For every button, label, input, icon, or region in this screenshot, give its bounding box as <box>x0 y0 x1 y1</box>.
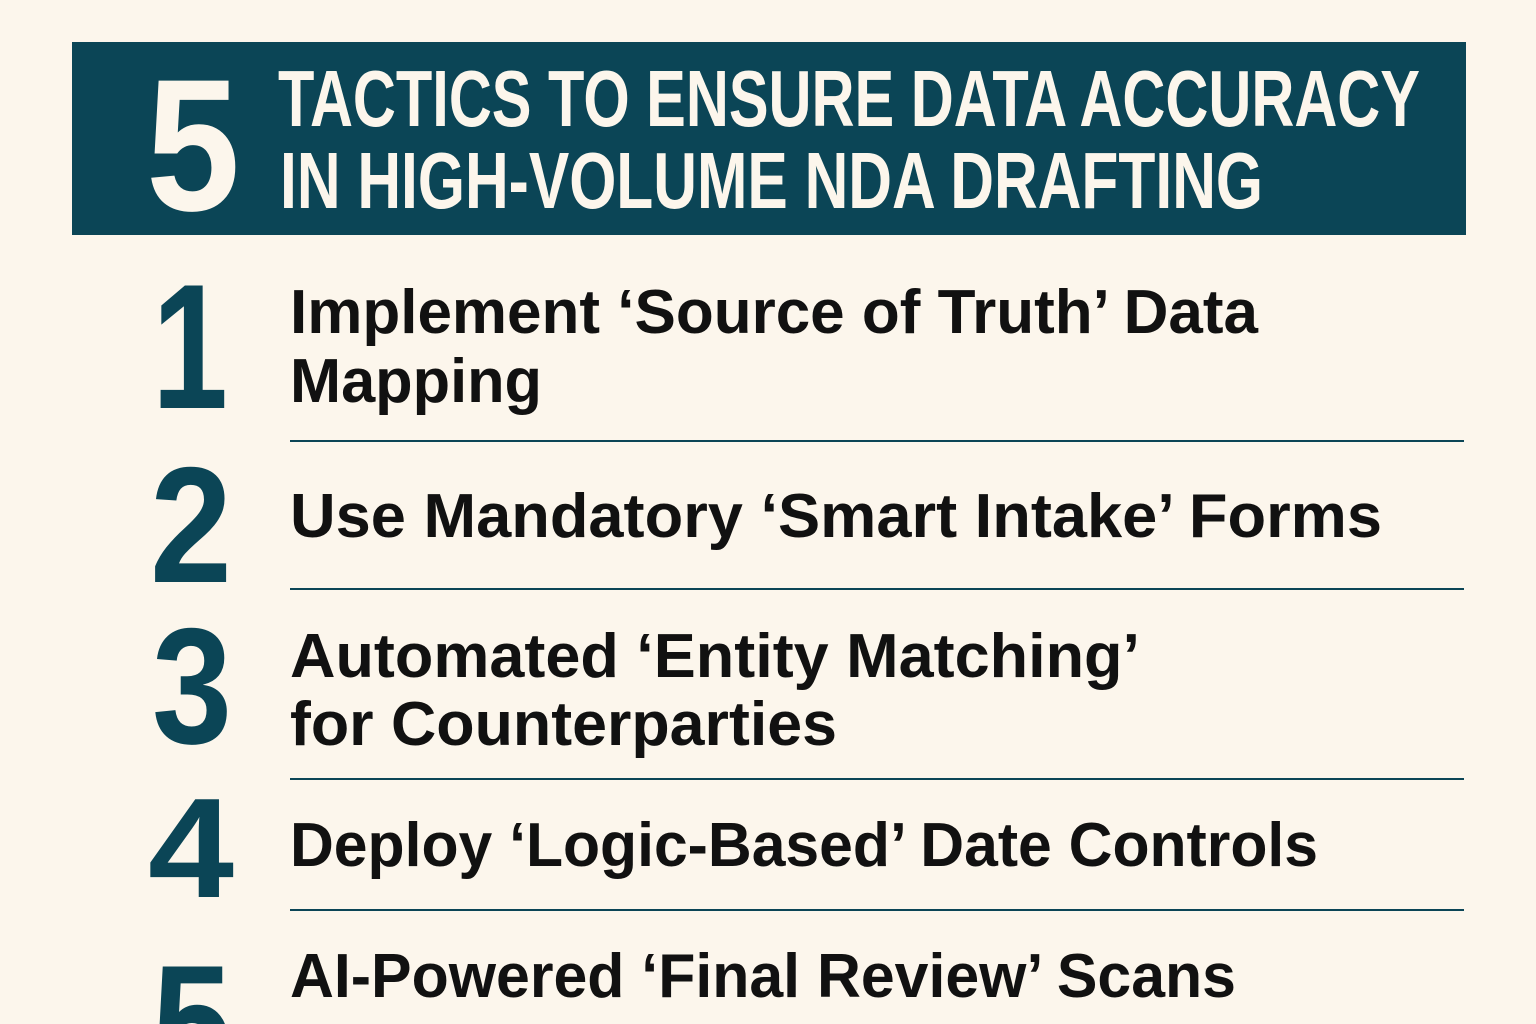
item 4 <box>148 769 1318 928</box>
item 5: AI-Powered ‘Final Review’ Scans <box>290 942 1236 1011</box>
item 3 <box>152 594 1140 778</box>
item 3: for Counterparties <box>290 690 837 759</box>
item 4: 4 <box>148 769 234 928</box>
item 1: Mapping <box>290 347 542 416</box>
item 3: Automated ‘Entity Matching’ <box>290 622 1140 691</box>
item 3: 3 <box>152 594 232 778</box>
item 2: 2 <box>150 433 232 617</box>
item 2 <box>150 433 1382 617</box>
item 2: Use Mandatory ‘Smart Intake’ Forms <box>290 482 1382 551</box>
item 5 <box>152 931 1236 1024</box>
item 1: 1 <box>152 247 228 446</box>
big number 5: 5 <box>146 40 240 250</box>
item 1: Implement ‘Source of Truth’ Data <box>290 278 1259 347</box>
item 4: Deploy ‘Logic-Based’ Date Controls <box>290 811 1318 880</box>
header banner <box>72 40 1466 250</box>
item 1 <box>152 247 1259 446</box>
title <box>278 54 1420 225</box>
